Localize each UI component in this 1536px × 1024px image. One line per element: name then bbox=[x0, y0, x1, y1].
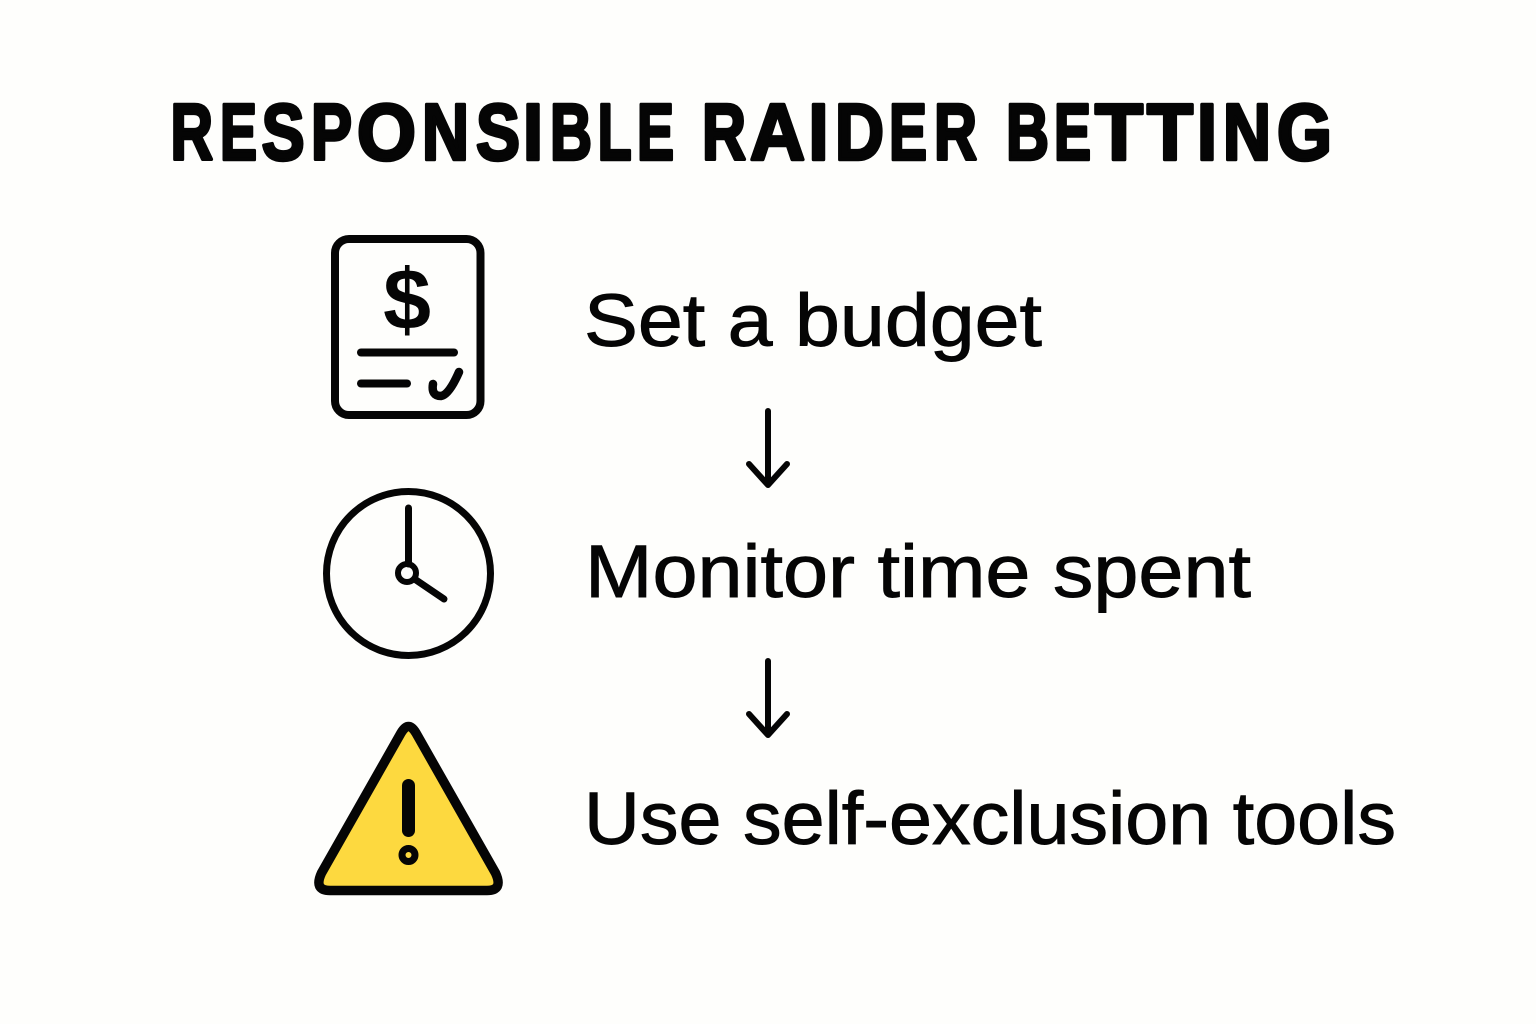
icon: warning triangle bbox=[319, 726, 498, 890]
title: S bbox=[476, 88, 520, 176]
title: O bbox=[357, 88, 416, 176]
text: set a budget: Set a budget bbox=[584, 279, 1042, 362]
title: E bbox=[889, 88, 927, 176]
title: E bbox=[220, 88, 257, 176]
title: D bbox=[835, 88, 884, 176]
title: A bbox=[750, 88, 805, 176]
title: I bbox=[1197, 88, 1217, 176]
title: P bbox=[311, 88, 352, 176]
title: B bbox=[1006, 88, 1049, 176]
title: G bbox=[1277, 88, 1332, 176]
title: R bbox=[702, 88, 746, 176]
title: I bbox=[808, 88, 828, 176]
title: B bbox=[550, 88, 592, 176]
text: use self-exclusion tools: Use self-exclusion tools bbox=[584, 777, 1396, 860]
title: T bbox=[1095, 88, 1143, 176]
title: R bbox=[934, 88, 977, 176]
title: N bbox=[1223, 88, 1271, 176]
arrow: time to tools bbox=[749, 661, 787, 735]
title: N bbox=[422, 88, 469, 176]
title: E bbox=[1054, 88, 1091, 176]
text: monitor time spent: Monitor time spent bbox=[585, 530, 1251, 613]
title: E bbox=[637, 88, 674, 176]
title: S bbox=[262, 88, 305, 176]
icon: budget document bbox=[335, 239, 480, 415]
arrow: budget to time bbox=[749, 411, 787, 485]
icon: budget document: $ bbox=[383, 252, 431, 348]
title: L bbox=[598, 88, 632, 176]
title: I bbox=[523, 88, 543, 176]
title: T bbox=[1147, 88, 1193, 176]
icon: clock bbox=[326, 492, 490, 656]
title: R bbox=[170, 88, 213, 176]
